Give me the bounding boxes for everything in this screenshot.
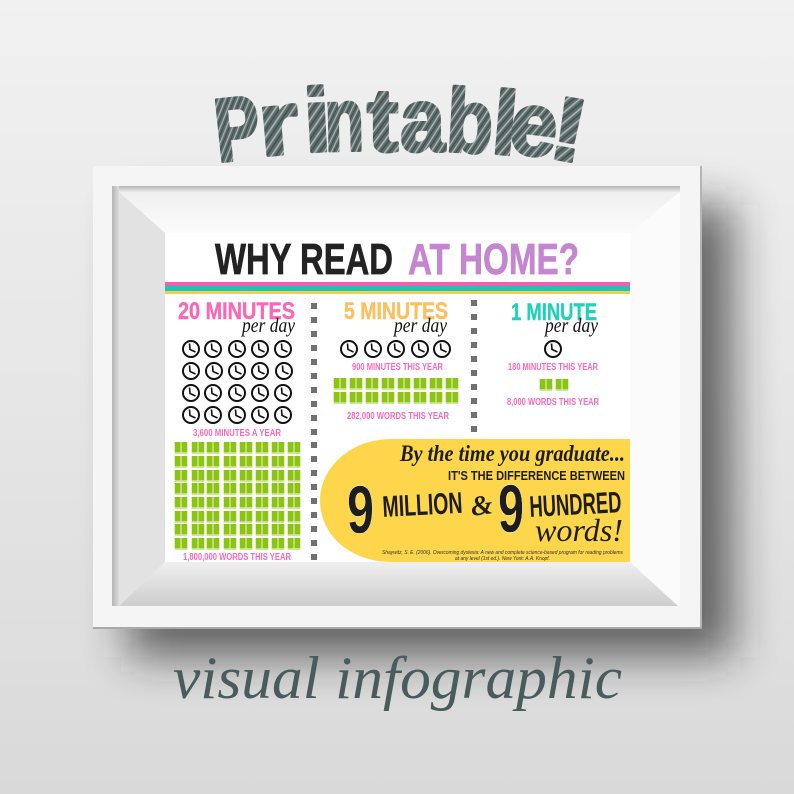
9 million <box>347 472 463 548</box>
heading: Printable!: t <box>367 69 398 171</box>
9 million: MILLION <box>382 487 463 524</box>
1 minute heading: 1 MINUTE <box>511 299 597 326</box>
per day: per day <box>392 315 447 337</box>
column: 5 minutes <box>334 298 458 422</box>
per day: per day <box>543 315 598 337</box>
callout subhead: IT'S THE DIFFERENCE BETWEEN <box>448 469 625 483</box>
minutes label: 180 MINUTES THIS YEAR <box>508 362 599 373</box>
clock row <box>341 341 450 357</box>
column: 1 minute <box>507 299 600 408</box>
heading: Printable! <box>209 69 595 183</box>
heading: Printable!: n <box>324 69 365 171</box>
clock <box>545 341 561 357</box>
heading: Printable!: i <box>301 70 334 172</box>
colour stripes <box>165 282 630 294</box>
words label: 8,000 WORDS THIS YEAR <box>507 397 600 408</box>
book grid <box>175 442 300 550</box>
citation: Shaywitz, S. E. (2006). Overcoming dyslexia: A new and complete science-based program for reading problems <box>382 550 623 556</box>
5 minutes heading: 5 MINUTES <box>344 298 448 325</box>
heading: Printable!: P <box>209 76 265 181</box>
minutes label: 900 MINUTES THIS YEAR <box>352 362 444 373</box>
ampersand: & <box>469 489 495 523</box>
words label: 282,000 WORDS THIS YEAR <box>347 411 450 422</box>
citation: at any level (1st ed.). New York: A.A. Knopf. <box>455 556 550 562</box>
per day: per day <box>240 315 295 337</box>
heading: Printable!: r <box>254 71 303 175</box>
words!: words! <box>535 512 623 548</box>
poster title <box>215 235 579 284</box>
9 hundred: 9 <box>498 471 524 547</box>
caption: visual infographic: visual infographic <box>173 645 622 711</box>
heading: Printable!: a <box>400 70 446 171</box>
heading: Printable!: b <box>444 69 496 173</box>
callout script line: By the time you graduate... <box>399 441 625 466</box>
20 minutes heading: 20 MINUTES <box>178 298 295 325</box>
callout: graduation difference <box>320 439 630 562</box>
heading: Printable!: ! <box>543 78 595 183</box>
poster <box>165 233 630 563</box>
column: 20 minutes <box>175 298 300 563</box>
minutes label: 3,600 MINUTES A YEAR <box>193 428 282 439</box>
books <box>540 379 568 391</box>
frame shadow <box>128 205 733 657</box>
poster title: WHY READ <box>215 235 393 284</box>
picture frame <box>93 166 702 629</box>
heading: Printable!: l <box>488 73 522 175</box>
9 million: 9 <box>347 472 374 548</box>
9 hundred <box>498 471 622 547</box>
words label: 1,800,000 WORDS THIS YEAR <box>183 552 292 563</box>
citation <box>382 550 623 562</box>
book rows <box>334 378 458 404</box>
9 hundred: HUNDRED <box>529 486 622 524</box>
clock grid <box>183 341 292 423</box>
poster title: AT HOME? <box>408 235 579 284</box>
heading: Printable!: e <box>505 72 564 177</box>
column dividers <box>311 300 477 560</box>
